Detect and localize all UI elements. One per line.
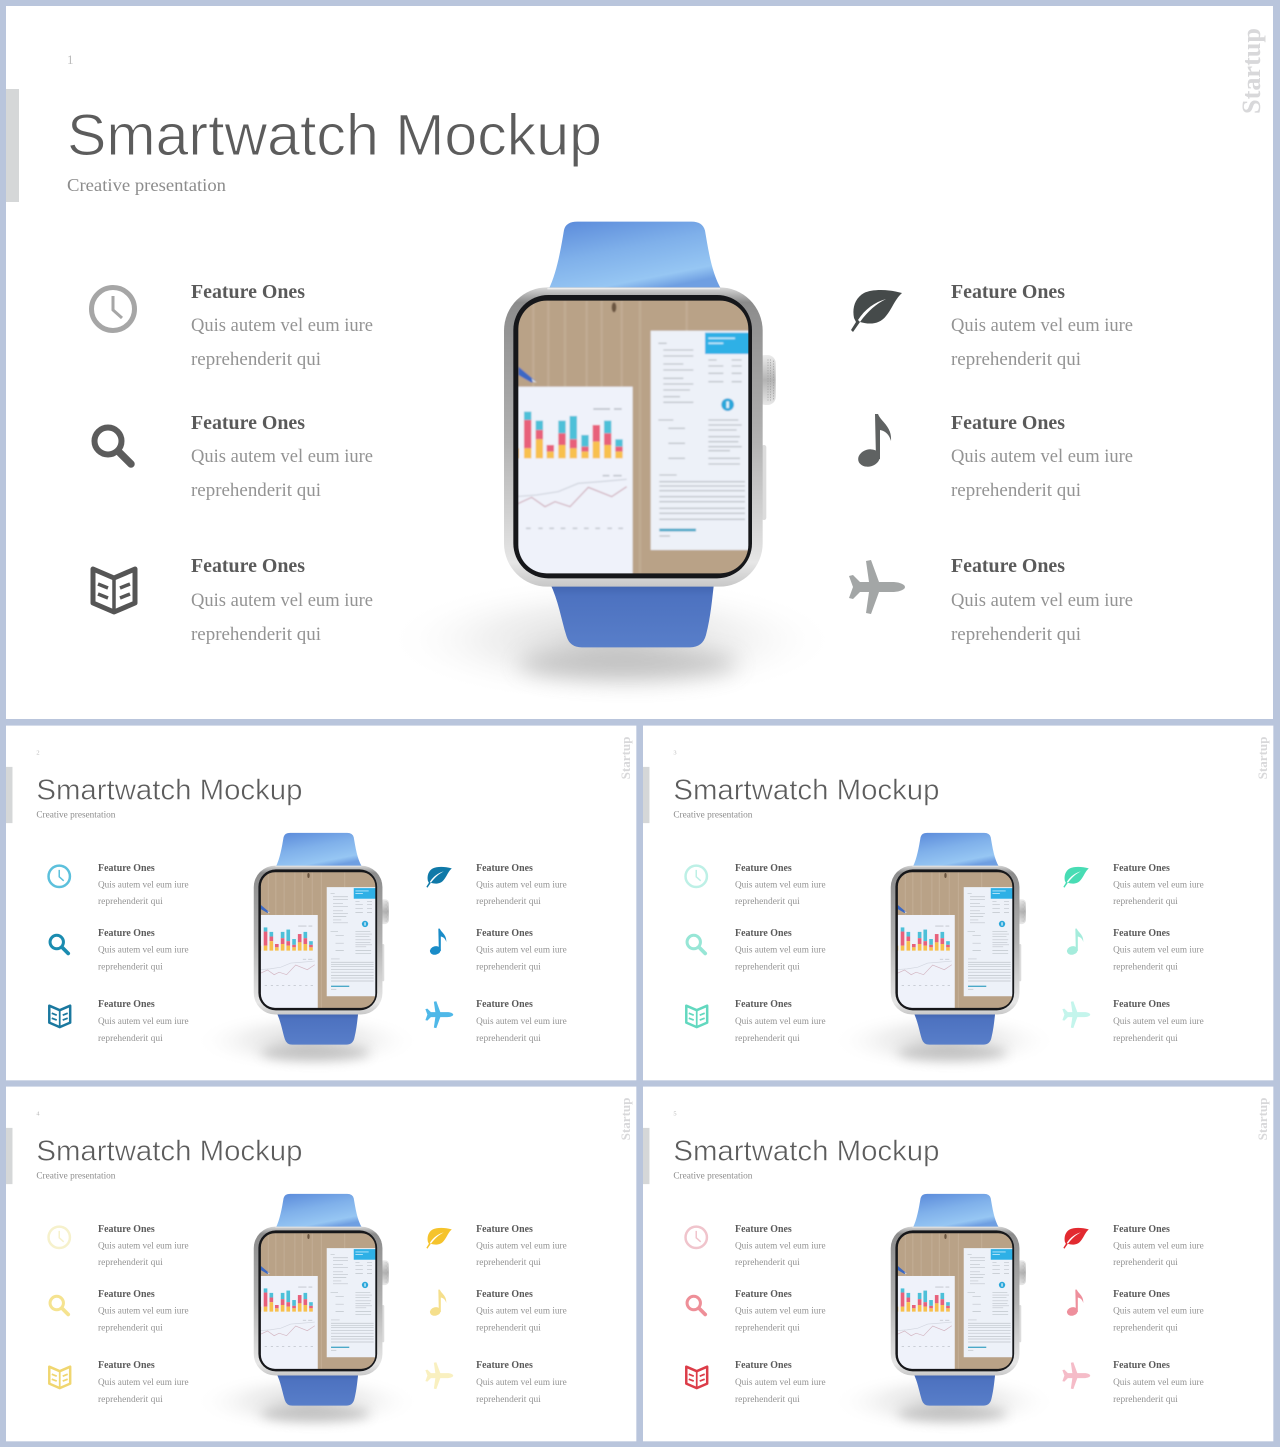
feature: plane [425, 1360, 567, 1405]
feature: plane [1062, 999, 1204, 1044]
feature: plane: Quis autem vel eum iure [476, 1378, 567, 1388]
feature: search: Feature Ones [191, 412, 305, 434]
accent bar [643, 1128, 649, 1184]
feature: clock: Quis autem vel eum iure [98, 880, 189, 890]
feature: music note: reprehenderit qui [476, 962, 541, 972]
feature: music note [1066, 1289, 1204, 1333]
feature: search [94, 412, 373, 501]
panel background [643, 1087, 1273, 1441]
feature: leaf [1063, 1224, 1204, 1268]
feature: clock: Feature Ones [735, 1224, 792, 1235]
feature: book: Quis autem vel eum iure [191, 590, 373, 611]
feature: music note: reprehenderit qui [476, 1323, 541, 1333]
slide number: 3 [673, 749, 677, 756]
title: Smartwatch Mockup [67, 103, 602, 168]
feature: search [687, 1289, 826, 1333]
feature: clock: Feature Ones [191, 281, 305, 303]
feature: search: Quis autem vel eum iure [735, 945, 826, 955]
feature: book: Feature Ones [735, 999, 792, 1010]
feature: music note [856, 412, 1133, 501]
feature: book [686, 1360, 826, 1405]
slide 2: blue [6, 726, 636, 1080]
feature: plane: reprehenderit qui [1113, 1034, 1178, 1044]
title: Smartwatch Mockup [673, 1136, 940, 1168]
feature: leaf [1063, 863, 1204, 907]
feature: leaf: Feature Ones [951, 281, 1065, 303]
brand label: Startup [1237, 28, 1266, 114]
feature: plane [425, 999, 567, 1044]
feature: plane: reprehenderit qui [476, 1395, 541, 1405]
feature: plane: Quis autem vel eum iure [1113, 1017, 1204, 1027]
feature: music note: Feature Ones [476, 1289, 533, 1300]
title: Smartwatch Mockup [36, 775, 303, 807]
feature: book: Quis autem vel eum iure [735, 1378, 826, 1388]
feature: book: reprehenderit qui [735, 1034, 800, 1044]
feature: plane [849, 555, 1133, 645]
feature: music note: Feature Ones [476, 928, 533, 939]
slide number: 2 [36, 749, 40, 756]
feature: search: reprehenderit qui [735, 962, 800, 972]
feature: plane [1062, 1360, 1204, 1405]
feature: leaf: Quis autem vel eum iure [1113, 880, 1204, 890]
feature: music note: Quis autem vel eum iure [476, 1306, 567, 1316]
feature: search: Quis autem vel eum iure [735, 1306, 826, 1316]
feature: search: Feature Ones [735, 928, 792, 939]
feature: book: Quis autem vel eum iure [98, 1378, 189, 1388]
accent bar [6, 89, 19, 202]
feature: clock: Quis autem vel eum iure [191, 315, 373, 336]
feature: plane: Feature Ones [476, 999, 533, 1010]
brand label: Startup [1255, 1098, 1270, 1140]
slide 4: yellow [6, 1087, 636, 1441]
feature: leaf: Quis autem vel eum iure [951, 315, 1133, 336]
subtitle: Creative presentation [673, 1171, 753, 1181]
feature: clock [49, 1224, 189, 1268]
feature: music note: Quis autem vel eum iure [951, 446, 1133, 467]
feature: search: Feature Ones [98, 1289, 155, 1300]
slide number: 4 [36, 1110, 40, 1117]
feature: plane: Feature Ones [951, 555, 1065, 577]
feature: search [50, 928, 189, 972]
feature: search: reprehenderit qui [191, 480, 321, 501]
feature: search: reprehenderit qui [98, 962, 163, 972]
feature: leaf [426, 863, 567, 907]
feature: clock: Feature Ones [735, 863, 792, 874]
watch mockup [194, 833, 421, 1073]
feature: search: reprehenderit qui [98, 1323, 163, 1333]
brand label: Startup [618, 1098, 633, 1140]
feature: leaf: Quis autem vel eum iure [476, 880, 567, 890]
feature: music note: Quis autem vel eum iure [1113, 1306, 1204, 1316]
accent bar [6, 1128, 12, 1184]
brand label: Startup [1255, 737, 1270, 779]
subtitle: Creative presentation [36, 1171, 116, 1181]
panel background [6, 1087, 636, 1441]
feature: plane: reprehenderit qui [1113, 1395, 1178, 1405]
feature: book: Feature Ones [735, 1360, 792, 1371]
subtitle: Creative presentation [673, 810, 753, 820]
feature: music note [429, 1289, 567, 1333]
feature: leaf: reprehenderit qui [476, 897, 541, 907]
feature: search: reprehenderit qui [735, 1323, 800, 1333]
feature: leaf: reprehenderit qui [1113, 897, 1178, 907]
feature: leaf: Feature Ones [1113, 1224, 1170, 1235]
feature: music note: Feature Ones [1113, 1289, 1170, 1300]
feature: search [687, 928, 826, 972]
feature: music note [1066, 928, 1204, 972]
feature: plane: Feature Ones [476, 1360, 533, 1371]
slide 3: mint [643, 726, 1273, 1080]
slide number: 1 [67, 52, 74, 67]
panel background [643, 726, 1273, 1080]
title: Smartwatch Mockup [36, 1136, 303, 1168]
feature: clock: reprehenderit qui [735, 1258, 800, 1268]
watch mockup [384, 222, 840, 704]
feature: clock: reprehenderit qui [735, 897, 800, 907]
feature: search: Feature Ones [98, 928, 155, 939]
slide number: 5 [673, 1110, 677, 1117]
feature: book: reprehenderit qui [98, 1034, 163, 1044]
feature: plane: Quis autem vel eum iure [951, 590, 1133, 611]
feature: leaf: Quis autem vel eum iure [476, 1241, 567, 1251]
title: Smartwatch Mockup [673, 775, 940, 807]
feature: clock: reprehenderit qui [98, 897, 163, 907]
feature: music note: reprehenderit qui [1113, 962, 1178, 972]
slide 5: red [643, 1087, 1273, 1441]
feature: search [50, 1289, 189, 1333]
feature: music note: Quis autem vel eum iure [1113, 945, 1204, 955]
feature: search: Feature Ones [735, 1289, 792, 1300]
feature: clock: Quis autem vel eum iure [98, 1241, 189, 1251]
feature: music note: Feature Ones [1113, 928, 1170, 939]
feature: plane: reprehenderit qui [951, 624, 1081, 645]
watch mockup [831, 833, 1058, 1073]
feature: clock [92, 281, 373, 370]
feature: leaf: Quis autem vel eum iure [1113, 1241, 1204, 1251]
watch mockup [831, 1194, 1058, 1434]
feature: music note: Quis autem vel eum iure [476, 945, 567, 955]
feature: leaf [851, 281, 1133, 370]
feature: book [49, 999, 189, 1044]
feature: search: Quis autem vel eum iure [98, 1306, 189, 1316]
feature: book [686, 999, 826, 1044]
feature: music note [429, 928, 567, 972]
feature: leaf: Feature Ones [476, 863, 533, 874]
feature: book: Feature Ones [191, 555, 305, 577]
feature: leaf [426, 1224, 567, 1268]
feature: leaf: reprehenderit qui [951, 349, 1081, 370]
feature: clock: Quis autem vel eum iure [735, 880, 826, 890]
feature: leaf: Feature Ones [476, 1224, 533, 1235]
panel background [6, 6, 1273, 719]
slide 1: grey large slide [6, 6, 1273, 719]
feature: leaf: reprehenderit qui [476, 1258, 541, 1268]
watch mockup [194, 1194, 421, 1434]
feature: clock [686, 1224, 826, 1268]
feature: music note: reprehenderit qui [1113, 1323, 1178, 1333]
feature: plane: Quis autem vel eum iure [476, 1017, 567, 1027]
feature: book [93, 555, 373, 645]
feature: book [49, 1360, 189, 1405]
feature: music note: reprehenderit qui [951, 480, 1081, 501]
feature: plane: reprehenderit qui [476, 1034, 541, 1044]
feature: clock: reprehenderit qui [98, 1258, 163, 1268]
feature: book: reprehenderit qui [98, 1395, 163, 1405]
feature: clock: reprehenderit qui [191, 349, 321, 370]
feature: search: Quis autem vel eum iure [191, 446, 373, 467]
feature: clock [686, 863, 826, 907]
accent bar [643, 767, 649, 823]
feature: book: Quis autem vel eum iure [735, 1017, 826, 1027]
feature: leaf: Feature Ones [1113, 863, 1170, 874]
panel background [6, 726, 636, 1080]
brand label: Startup [618, 737, 633, 779]
feature: plane: Feature Ones [1113, 999, 1170, 1010]
feature: plane: Quis autem vel eum iure [1113, 1378, 1204, 1388]
feature: plane: Feature Ones [1113, 1360, 1170, 1371]
feature: book: Feature Ones [98, 999, 155, 1010]
subtitle: Creative presentation [36, 810, 116, 820]
feature: clock: Quis autem vel eum iure [735, 1241, 826, 1251]
feature: clock: Feature Ones [98, 1224, 155, 1235]
feature: music note: Feature Ones [951, 412, 1065, 434]
feature: clock [49, 863, 189, 907]
feature: book: reprehenderit qui [191, 624, 321, 645]
feature: clock: Feature Ones [98, 863, 155, 874]
subtitle: Creative presentation [67, 175, 226, 195]
feature: book: reprehenderit qui [735, 1395, 800, 1405]
feature: leaf: reprehenderit qui [1113, 1258, 1178, 1268]
accent bar [6, 767, 12, 823]
feature: book: Feature Ones [98, 1360, 155, 1371]
feature: book: Quis autem vel eum iure [98, 1017, 189, 1027]
feature: search: Quis autem vel eum iure [98, 945, 189, 955]
